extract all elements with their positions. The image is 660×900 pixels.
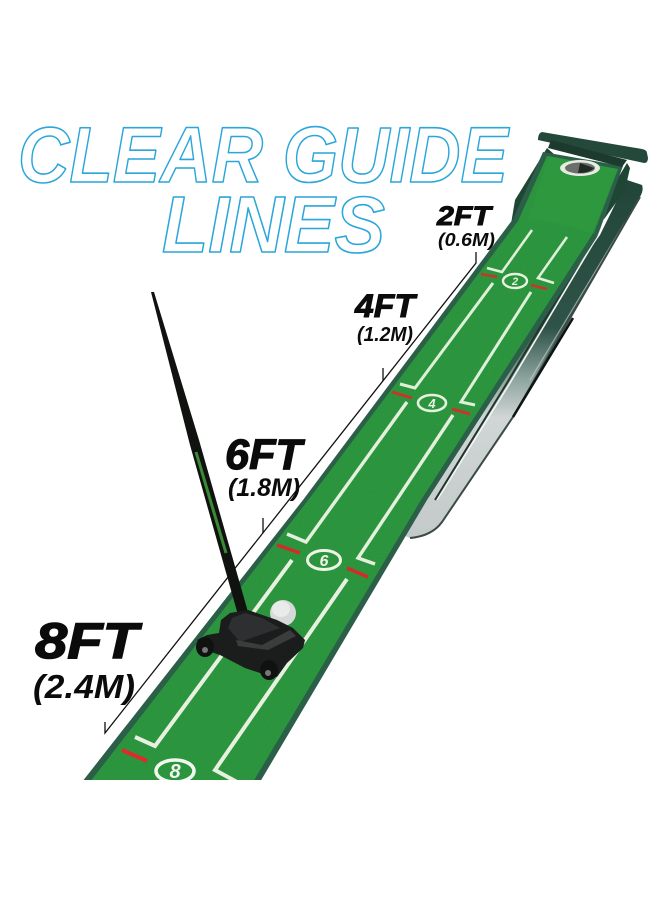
title: clear guide lines: CLEAR GUIDE — [18, 110, 511, 199]
number marker 4: 4 — [427, 396, 436, 411]
label: 4ft — [354, 288, 418, 346]
number marker 8 — [156, 760, 194, 783]
mat side walls — [511, 148, 630, 238]
label: 8ft: (2.4M) — [33, 668, 135, 705]
title: clear guide lines — [18, 110, 511, 269]
title: clear guide lines: LINES — [162, 180, 385, 269]
red distance markers — [122, 274, 547, 761]
plate hinge shadow — [548, 140, 627, 167]
putter — [151, 292, 305, 680]
guide lines: 2ft section — [487, 230, 567, 283]
mat dark border — [82, 152, 623, 782]
label: 2ft — [436, 201, 495, 250]
number marker 2: 2 — [511, 276, 518, 288]
label: 2ft: 2FT — [436, 201, 494, 231]
back plate at the cup end — [538, 132, 648, 163]
storage tray behind the mat — [392, 180, 643, 538]
number marker 4 — [418, 395, 446, 411]
label: 4ft: 4FT — [354, 288, 418, 324]
cup hole — [560, 160, 600, 176]
label: 8ft: 8FT — [35, 613, 143, 669]
number marker 6 — [308, 550, 340, 570]
number marker 8: 8 — [169, 761, 181, 783]
label: 8ft — [33, 613, 143, 705]
label: 4ft: (1.2M) — [357, 324, 413, 346]
putter shaft — [151, 292, 248, 615]
golf ball — [270, 600, 296, 626]
guide lines: 4ft to 6ft — [287, 402, 453, 564]
label: 6ft: 6FT — [225, 431, 306, 479]
number marker 6: 6 — [320, 553, 329, 570]
label: 6ft: (1.8M) — [228, 474, 300, 502]
putter head highlight — [228, 613, 280, 642]
infographic canvas — [20, 126, 648, 780]
number marker 2 — [503, 274, 527, 288]
mat raised hole section — [549, 156, 618, 234]
guide lines: 6ft to 8ft — [135, 560, 347, 782]
putter wheels — [196, 637, 214, 657]
putter head — [197, 610, 305, 677]
putting mat — [82, 148, 630, 783]
label: 2ft: (0.6M) — [438, 230, 495, 250]
distance guide rule — [105, 252, 476, 733]
putter shaft green accent — [196, 452, 226, 553]
mat green surface — [90, 156, 618, 782]
label: 6ft — [225, 431, 306, 502]
guide lines: 2ft to 4ft — [400, 283, 531, 405]
